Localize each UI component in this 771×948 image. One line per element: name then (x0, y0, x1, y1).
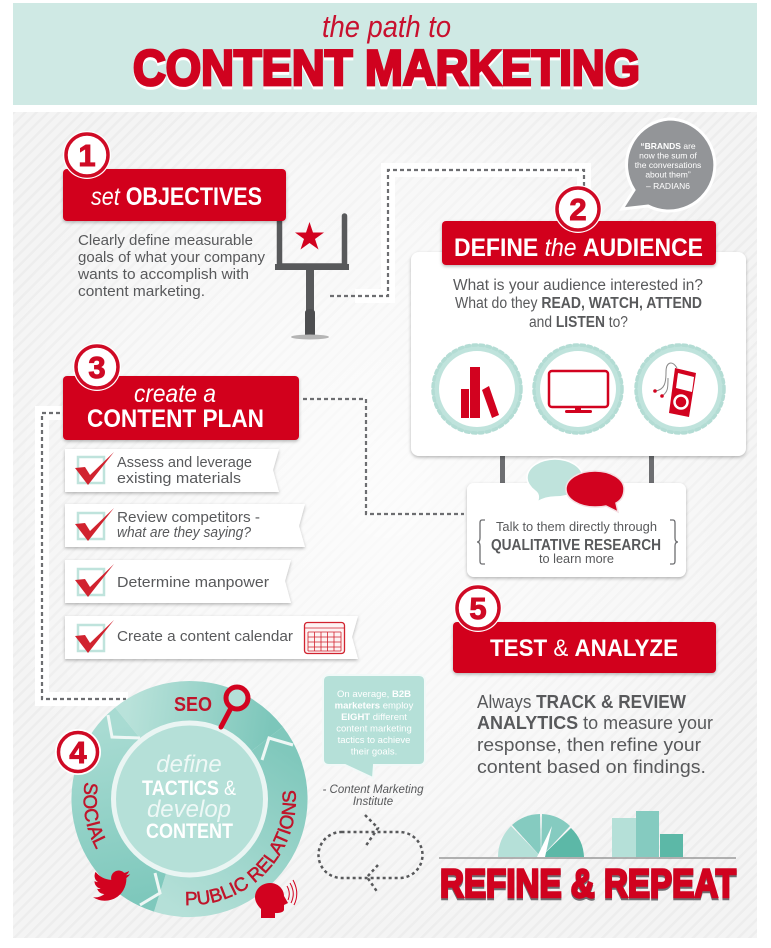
callout: B2B tactics statistic (323, 675, 425, 778)
step 5 text: response, then refine your (477, 734, 701, 755)
title: the path to: the path to (322, 9, 451, 44)
quote bubble: Radian6: – RADIAN6 (646, 181, 690, 191)
icon: magnifying glass (221, 687, 248, 727)
icon: red star (295, 222, 324, 250)
dotted connector: step 3 to step 4 (42, 413, 128, 699)
icon: calendar (304, 622, 344, 654)
research text: to learn more (539, 551, 614, 566)
callout: B2B tactics statistic: tactics to achieve (338, 735, 410, 746)
number badge 5 (454, 584, 502, 632)
callout: B2B tactics statistic: On average, B2B (337, 689, 411, 700)
research text (491, 519, 661, 566)
quote bubble: Radian6: the conversations (635, 160, 701, 170)
tactics ring (71, 681, 308, 918)
baseline rule (439, 857, 736, 859)
dotted loop arrow (318, 815, 422, 893)
callout: B2B tactics statistic: content marketing (336, 724, 412, 734)
audience question text: What do they READ, WATCH, ATTEND (455, 295, 702, 312)
centre disc: define (156, 751, 222, 778)
label: public relations: PUBLIC RELATIONS (186, 790, 296, 906)
number badge 4 (55, 729, 101, 775)
checklist item: manpower (65, 560, 291, 603)
gauge chart (498, 814, 584, 857)
checklist item: assess (65, 449, 279, 492)
step 5 text (477, 691, 713, 777)
panel: audience (411, 252, 746, 456)
connectors between audience panels (500, 455, 654, 485)
callout: B2B tactics statistic: EIGHT different (341, 712, 407, 723)
quote bubble: Radian6 (622, 119, 715, 211)
number badge 4: 4 (69, 735, 87, 770)
audience question text: and LISTEN to? (529, 314, 628, 331)
step 3 banner: CONTENT PLAN (87, 405, 264, 433)
number badge 2: 2 (569, 192, 587, 227)
number badge 2 (554, 185, 602, 233)
label: social: SOCIAL (83, 782, 106, 850)
number badge 1 (63, 131, 111, 179)
centre disc (114, 723, 266, 875)
label: SEO: SEO (174, 694, 212, 716)
ring segment: SEO arrow (128, 701, 267, 739)
goalpost icon (275, 216, 349, 340)
ring segment: public relations arrow (160, 739, 288, 897)
title: content marketing: CONTENT MARKETING (133, 43, 640, 99)
number badge 1: 1 (78, 138, 96, 173)
attribution: Content Marketing Institute: Institute (353, 796, 393, 808)
bar chart (612, 811, 683, 857)
research text: Talk to them directly through (496, 519, 657, 534)
step 1 text: goals of what your company (78, 250, 266, 266)
step 1 text: Clearly define measurable (78, 233, 253, 249)
number badge 3: 3 (88, 350, 106, 385)
checklist item: manpower: Determine manpower (117, 575, 269, 591)
right brace (670, 520, 678, 564)
attribution: Content Marketing Institute: - Content Marketing (322, 784, 424, 796)
icon: twitter bird (93, 870, 130, 901)
attribution: Content Marketing Institute (322, 784, 424, 808)
checklist item: assess: existing materials (117, 471, 241, 487)
heading: define the audience: DEFINE the AUDIENCE (454, 234, 703, 262)
centre disc: TACTICS & (142, 777, 236, 800)
icon: television badge (534, 345, 622, 433)
arrow dividers (108, 715, 293, 905)
callout: B2B tactics statistic: marketers employ (335, 700, 414, 712)
callout: B2B tactics statistic: their goals. (351, 746, 397, 758)
step 1 text: content marketing. (78, 284, 205, 300)
audience question text: What is your audience interested in? (453, 277, 703, 294)
dotted connector: step 1 to step 2 (330, 170, 584, 296)
left brace (477, 520, 485, 564)
checklist item: content calendar (65, 616, 358, 659)
title: content marketing: CONTENT MARKETING (133, 40, 640, 96)
step 1 banner (63, 131, 286, 221)
heading: create a content plan: create a (134, 380, 216, 408)
checklist item: review competitors: what are they saying? (117, 525, 252, 541)
icon: music player badge (636, 345, 724, 433)
audience question text (453, 277, 703, 331)
step 1 text (77, 233, 266, 300)
research text: QUALITATIVE RESEARCH (491, 537, 661, 554)
checklist item: content calendar: Create a content calendar (117, 629, 293, 645)
panel: qualitative research (467, 459, 686, 577)
heading: set objectives: set OBJECTIVES (91, 183, 262, 211)
quote bubble: Radian6: “BRANDS are (640, 141, 696, 151)
number badge 5: 5 (469, 591, 487, 626)
checklist item: assess: Assess and leverage (117, 455, 252, 471)
dotted connector: step 3 to qualitative research (303, 399, 464, 514)
icon: teal speech bubble (527, 459, 583, 502)
icon: speaking head (255, 880, 297, 918)
quote bubble: Radian6: about them” (645, 170, 691, 180)
step 2 banner (442, 185, 716, 265)
step 5 text: content based on findings. (477, 756, 706, 777)
centre disc: CONTENT (146, 820, 233, 843)
icon: books badge (433, 345, 521, 433)
step 3 banner (63, 343, 299, 440)
checklist item: review competitors (65, 504, 305, 547)
step 5 banner (453, 584, 716, 673)
heading: test and analyze: TEST & ANALYZE (490, 635, 678, 662)
step 5 text: ANALYTICS to measure your (477, 712, 713, 733)
quote bubble: Radian6: now the sum of (639, 150, 697, 160)
header band (13, 3, 757, 105)
step 5 text: Always TRACK & REVIEW (477, 691, 686, 712)
icon: red speech bubble (566, 471, 624, 512)
number badge 3 (73, 343, 121, 391)
step 1 text: wants to accomplish with (77, 267, 249, 283)
centre disc: develop (147, 796, 231, 823)
ring segment: social arrow (92, 723, 160, 892)
checklist item: review competitors: Review competitors - (117, 510, 260, 526)
